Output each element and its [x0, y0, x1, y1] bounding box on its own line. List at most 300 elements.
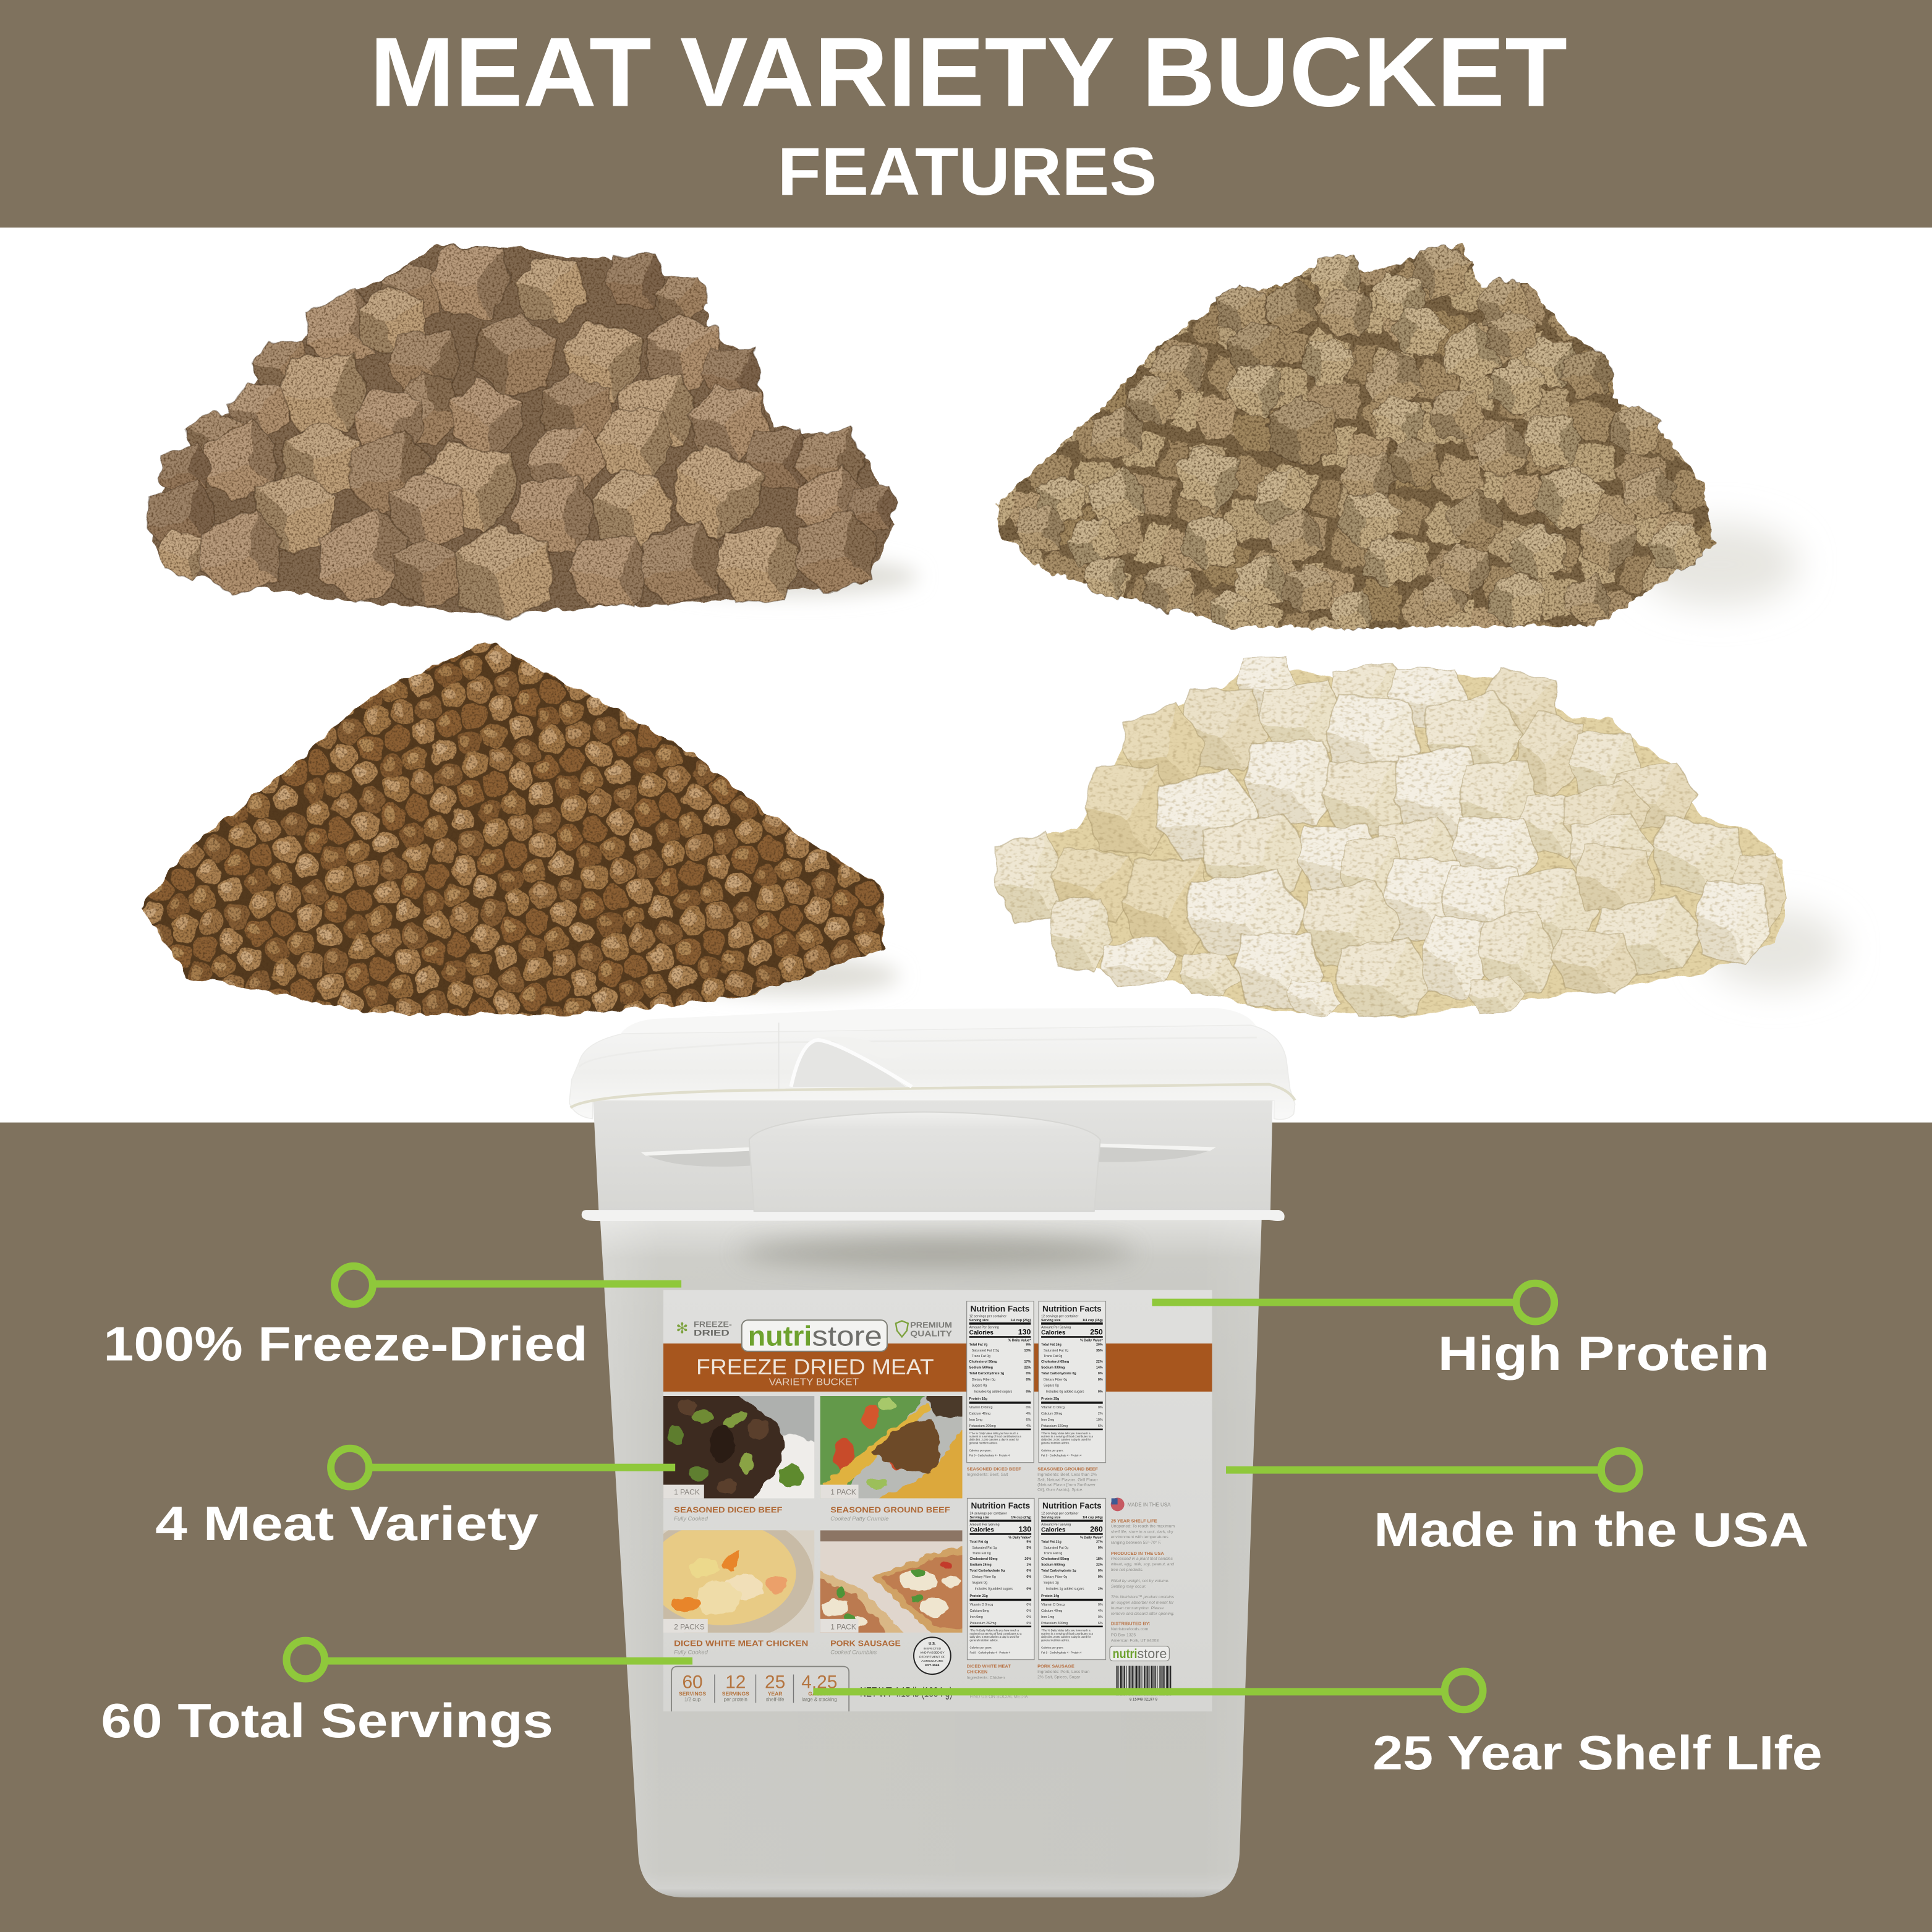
nutrition facts: seasoned ground beef: *The % Daily Value tells you how much a [1041, 1432, 1091, 1435]
pile shadow: ground beef [1639, 522, 1799, 606]
nutrition facts: diced white meat chicken: 24 servings per container [969, 1512, 1007, 1515]
ingredients: seasoned ground beef [1037, 1466, 1099, 1492]
food pile: diced white meat chicken [989, 653, 1789, 1020]
photo caption: seasoned ground beef: Cooked Patty Crumble [830, 1515, 888, 1521]
callout: 100% freeze-dried: 100% Freeze-Dried [103, 1317, 588, 1371]
label: nutristore logo: nutri [748, 1320, 812, 1351]
storage and distribution copy: Unopened: To reach the maximum [1111, 1524, 1175, 1528]
nutrition facts: seasoned diced beef: Calories [969, 1329, 994, 1336]
callout: made in the usa [1226, 1451, 1809, 1557]
nutrition facts: seasoned diced beef: 17% [1024, 1360, 1031, 1364]
nutrition facts: pork sausage: 4% [1098, 1609, 1103, 1613]
ingredients: pork sausage: 2% Salt, Spices, Sugar [1037, 1675, 1081, 1679]
nutrition facts: seasoned ground beef: 2% [1098, 1412, 1103, 1416]
nutrition facts: seasoned ground beef: Calories per gram: [1041, 1449, 1063, 1452]
stat: servings [679, 1672, 706, 1702]
nutrition facts: seasoned ground beef: Serving size [1041, 1319, 1060, 1322]
callout: made in the usa: Made in the USA [1374, 1504, 1809, 1557]
stat: servings per protein: SERVINGS [722, 1690, 749, 1696]
storage and distribution copy: 25 YEAR SHELF LIFE [1111, 1518, 1157, 1523]
nutrition facts: seasoned ground beef: Amount Per Serving [1041, 1326, 1071, 1329]
usda inspection seal: DEPARTMENT OF [919, 1655, 945, 1659]
nutrition facts: pork sausage: Iron 1mg [1041, 1615, 1054, 1619]
stat: servings per protein [722, 1672, 749, 1702]
nutrition facts: pork sausage: Calories [1041, 1526, 1066, 1533]
header banner [0, 0, 1932, 228]
photo caption: diced white meat chicken: Fully Cooked [674, 1649, 709, 1656]
callout: 25 year shelf life: 25 Year Shelf LIfe [1372, 1727, 1823, 1780]
nutrition facts: pork sausage: Serving size [1041, 1516, 1060, 1520]
ingredients: seasoned ground beef: Salt, Natural Flavors, Grill Flavor [1037, 1478, 1099, 1483]
nutrition facts: diced white meat chicken: Vitamin D 0mcg [969, 1603, 993, 1607]
ingredients: seasoned ground beef: Oil], Gum Arabic), Spice. [1037, 1488, 1083, 1492]
nutrition facts: seasoned ground beef: Saturated Fat 7g [1044, 1349, 1068, 1353]
usda inspection seal: U.S. [929, 1643, 936, 1646]
nutrition facts: pork sausage: Includes 1g added sugars [1046, 1588, 1084, 1591]
callout: high protein [1152, 1283, 1769, 1381]
nutrition facts: seasoned ground beef: Sodium 330mg [1041, 1366, 1065, 1370]
nutrition facts: diced white meat chicken: nutrient in a serving of food contributes to a [969, 1632, 1022, 1635]
nutrition facts: pork sausage: 0% [1098, 1615, 1103, 1619]
nutrition facts: seasoned ground beef: Potassium 320mg [1041, 1424, 1068, 1428]
storage and distribution copy: an oxygen absorber not meant for [1111, 1601, 1174, 1605]
nutrition facts: pork sausage: Calories per gram: [1041, 1646, 1063, 1649]
bucket handle recess [749, 1112, 1100, 1211]
nutrition facts: seasoned diced beef: 130 [1018, 1327, 1031, 1336]
pack tag: 1 pack: 1 PACK [674, 1487, 700, 1496]
storage and distribution copy: remove and discard after opening. [1111, 1612, 1175, 1616]
nutrition facts: pork sausage: Sugars 1g [1044, 1581, 1059, 1585]
pack tag: 1 pack [663, 1485, 704, 1498]
storage and distribution copy: wheat, egg, milk, soy, peanut, and [1111, 1562, 1174, 1567]
nutrition facts: seasoned diced beef: Serving size [969, 1319, 989, 1322]
ingredients: diced white meat chicken: CHICKEN [967, 1669, 987, 1674]
ingredients: pork sausage: Ingredients: Pork, Less than [1037, 1670, 1090, 1674]
food pile: pork sausage crumbles [142, 640, 885, 1015]
nutrition facts: pork sausage: Total Carbohydrate 1g [1041, 1569, 1076, 1573]
nutrition facts: seasoned diced beef: Nutrition Facts [971, 1303, 1030, 1313]
stat: servings: SERVINGS [679, 1690, 706, 1696]
nutrition facts: seasoned diced beef: *The % Daily Value tells you how much a [969, 1432, 1019, 1435]
stat: servings per protein: per protein [724, 1696, 747, 1702]
bottom panel background [0, 1123, 1932, 1932]
nutrition facts: seasoned diced beef: Total Carbohydrate 1g [969, 1372, 1004, 1376]
nutrition facts: diced white meat chicken: % Daily Value* [1008, 1536, 1032, 1539]
usda inspection seal: INSPECTED [924, 1647, 942, 1651]
nutrition facts: seasoned diced beef: Saturated Fat 2.5g [972, 1349, 999, 1353]
callout: high protein: High Protein [1438, 1327, 1769, 1381]
net weight: NET WT 4.15 lb (1884 g) [860, 1684, 953, 1700]
nutrition facts: seasoned diced beef: 0% [1026, 1372, 1031, 1376]
nutrition facts: seasoned ground beef: Calories [1041, 1329, 1066, 1336]
nutrition facts: diced white meat chicken: Calcium 8mg [969, 1609, 989, 1613]
ingredients: diced white meat chicken: DICED WHITE MEAT [967, 1664, 1011, 1669]
nutrition facts: pork sausage: Nutrition Facts [1042, 1500, 1102, 1510]
nutrition facts: seasoned diced beef: Sodium 500mg [969, 1366, 993, 1370]
nutrition facts: diced white meat chicken: 0% [1026, 1603, 1031, 1607]
nutrition facts: seasoned diced beef: 22% [1024, 1366, 1031, 1370]
nutrition facts: seasoned diced beef: 6% [1026, 1418, 1031, 1422]
storage and distribution copy: shelf life, store in a cool, dark, dry [1111, 1530, 1173, 1534]
nutrition facts: seasoned ground beef: 0% [1098, 1378, 1103, 1382]
ingredients: seasoned diced beef [967, 1466, 1021, 1477]
nutrition facts: diced white meat chicken: Total Fat 4g [969, 1541, 988, 1544]
label: orange banner [663, 1343, 1212, 1392]
photo caption: seasoned diced beef: SEASONED DICED BEEF [674, 1505, 783, 1515]
nutrition facts: diced white meat chicken: Calories [969, 1526, 994, 1533]
nutrition facts: pork sausage: Calcium 40mg [1041, 1609, 1062, 1613]
storage and distribution copy: environment with temperatures [1111, 1535, 1168, 1539]
nutrition facts: pork sausage: nutrient in a serving of food contributes to a [1041, 1632, 1094, 1635]
made in the usa note: MADE IN THE USA [1128, 1502, 1171, 1507]
nutrition facts: pork sausage: 1/4 cup (40g) [1083, 1516, 1103, 1520]
nutrition facts: diced white meat chicken: 20% [1024, 1557, 1031, 1561]
nutrition facts: diced white meat chicken: 0% [1026, 1615, 1031, 1619]
nutrition facts: seasoned diced beef: % Daily Value* [1008, 1339, 1031, 1343]
nutrition facts: seasoned ground beef: % Daily Value* [1080, 1339, 1104, 1343]
nutrition facts: diced white meat chicken: Protein 21g [969, 1594, 988, 1598]
nutrition facts: seasoned diced beef: nutrient in a serving of food contributes to a [969, 1435, 1021, 1438]
nutrition facts: seasoned diced beef: general nutrition advice. [969, 1441, 998, 1444]
ingredients: pork sausage: PORK SAUSAGE [1037, 1664, 1075, 1669]
nutrition facts: seasoned ground beef: 12 servings per container [1041, 1315, 1079, 1319]
nutrition facts: seasoned ground beef: 250 [1090, 1327, 1103, 1336]
stat: gallons: 4.25 [801, 1672, 837, 1692]
storage and distribution copy: ranging between 55°-70° F. [1111, 1540, 1162, 1545]
nutrition facts: seasoned ground beef: 0% [1098, 1390, 1103, 1394]
nutrition facts: pork sausage: 2% [1098, 1588, 1103, 1591]
nutrition facts: seasoned ground beef: Dietary Fiber 0g [1044, 1378, 1067, 1382]
ingredients: pork sausage [1037, 1664, 1090, 1679]
small nutristore logo: nutri [1113, 1647, 1138, 1661]
nutrition facts: diced white meat chicken: *The % Daily Value tells you how much a [969, 1629, 1019, 1632]
product: white bucket [569, 1008, 1295, 1899]
ingredients: diced white meat chicken: Ingredients: Chicken [967, 1675, 1005, 1680]
nutrition facts: seasoned ground beef: Protein 25g [1041, 1397, 1059, 1401]
photo caption: seasoned diced beef [674, 1505, 783, 1521]
label: freeze-dried badge: DRIED [694, 1327, 730, 1337]
callout: 4 meat variety [155, 1449, 675, 1551]
callout: 4 meat variety: 4 Meat Variety [155, 1497, 538, 1551]
stat: shelf life: 25 [765, 1672, 785, 1692]
nutrition facts: diced white meat chicken: 1% [1026, 1563, 1031, 1567]
nutrition facts: seasoned ground beef: general nutrition advice. [1041, 1441, 1070, 1444]
nutrition facts: diced white meat chicken: 1/4 cup (27g) [1011, 1516, 1031, 1520]
nutrition facts: diced white meat chicken: Fat 9 · Carbohydrate 4 · Protein 4 [969, 1651, 1010, 1654]
nutrition facts: diced white meat chicken: Nutrition Facts [971, 1500, 1030, 1510]
barcode [1117, 1680, 1172, 1701]
nutrition facts: pork sausage: 12 servings per container [1041, 1512, 1079, 1515]
barcode: 8 15049 02197 9 [1130, 1698, 1158, 1701]
nutrition facts: seasoned ground beef: 1/4 cup (35g) [1083, 1319, 1103, 1322]
nutrition facts: pork sausage: 0% [1098, 1575, 1103, 1579]
pack tag: 2 packs [663, 1619, 708, 1633]
nutrition facts: seasoned diced beef: Iron 1mg [969, 1418, 982, 1422]
nutrition facts: pork sausage: 0% [1098, 1569, 1103, 1573]
nutrition facts: diced white meat chicken: 5% [1026, 1541, 1031, 1544]
nutrition facts: pork sausage: 0% [1098, 1603, 1103, 1607]
nutrition facts: diced white meat chicken: daily diet. 2,000 calories a day is used for [969, 1635, 1019, 1638]
nutrition facts: seasoned diced beef: Cholesterol 50mg [969, 1360, 997, 1364]
stat: shelf life [765, 1672, 785, 1702]
nutrition facts: seasoned diced beef: 0% [1026, 1390, 1031, 1394]
nutrition facts: diced white meat chicken: 0% [1026, 1575, 1031, 1579]
nutrition facts: seasoned ground beef: Iron 2mg [1041, 1418, 1054, 1422]
nutrition facts: diced white meat chicken: Cholesterol 60mg [969, 1557, 998, 1561]
pack tag: 1 pack: 1 PACK [830, 1623, 856, 1632]
nutrition facts: seasoned ground beef: 35% [1096, 1349, 1103, 1353]
nutrition facts: diced white meat chicken: Calories per gram: [969, 1646, 992, 1649]
nutrition facts: seasoned ground beef: 22% [1096, 1360, 1103, 1364]
nutrition facts: diced white meat chicken: 0% [1026, 1609, 1031, 1613]
nutrition facts: pork sausage: daily diet. 2,000 calories a day is used for [1041, 1635, 1091, 1638]
nutrition facts: pork sausage: *The % Daily Value tells you how much a [1041, 1629, 1091, 1632]
storage and distribution copy: American Fork, UT 84003 [1111, 1639, 1159, 1643]
bucket label [640, 1290, 1212, 1711]
nutrition facts: seasoned diced beef: Total Fat 7g [969, 1343, 987, 1347]
pack tag: 1 pack [820, 1485, 859, 1498]
label: freeze-dried badge: FREEZE- [694, 1319, 732, 1329]
label: freeze-dried badge [676, 1319, 732, 1337]
nutrition facts: seasoned ground beef: 10% [1096, 1418, 1103, 1422]
nutrition facts: diced white meat chicken: Saturated Fat 1g [972, 1546, 997, 1550]
nutrition facts: diced white meat chicken: Dietary Fiber 0g [972, 1575, 996, 1579]
label: premium quality badge: QUALITY [910, 1329, 953, 1338]
nutrition facts: seasoned diced beef: 4% [1026, 1412, 1031, 1416]
nutrition facts: seasoned ground beef: Calcium 30mg [1041, 1412, 1062, 1416]
nutrition facts: seasoned diced beef: 9% [1026, 1343, 1031, 1347]
nutrition facts: diced white meat chicken: Potassium 262mg [969, 1622, 997, 1625]
stats box [671, 1667, 849, 1711]
nutrition facts: pork sausage: Saturated Fat 0g [1044, 1546, 1068, 1550]
stat: gallons [801, 1672, 837, 1702]
nutrition facts: diced white meat chicken: Total Carbohydrate 0g [969, 1569, 1005, 1573]
label: premium quality badge [896, 1320, 953, 1338]
nutrition facts: pork sausage: 27% [1096, 1541, 1103, 1544]
nutrition facts: pork sausage: 22% [1096, 1563, 1103, 1567]
nutrition facts: seasoned ground beef: 6% [1098, 1424, 1103, 1428]
nutrition facts: pork sausage [1039, 1498, 1106, 1660]
pile shadow: diced beef [659, 557, 918, 597]
callout: 60 total servings [101, 1641, 692, 1748]
photo: seasoned ground beef [820, 1396, 962, 1499]
usda inspection seal: AND PASSED BY [920, 1651, 945, 1655]
nutrition facts: pork sausage: Potassium 300mg [1041, 1622, 1068, 1625]
photo caption: pork sausage [830, 1639, 901, 1656]
nutrition facts: diced white meat chicken: 6% [1026, 1622, 1031, 1625]
ingredients: seasoned diced beef: Ingredients: Beef, Salt [967, 1473, 1008, 1477]
nutrition facts: seasoned diced beef: Sugars 0g [972, 1384, 987, 1388]
nutrition facts: seasoned ground beef: Trans Fat 0g [1044, 1355, 1062, 1358]
label: nutristore logo [742, 1320, 887, 1351]
photo caption: pork sausage: PORK SAUSAGE [830, 1639, 901, 1648]
stat: gallons: large & stacking [802, 1696, 837, 1702]
storage and distribution copy: tree nut products. [1111, 1568, 1144, 1572]
storage and distribution copy: Nutristorefoods.com [1111, 1627, 1149, 1632]
nutrition facts: pork sausage: Dietary Fiber 0g [1044, 1575, 1067, 1579]
nutrition facts: seasoned ground beef: Total Carbohydrate 0g [1041, 1372, 1076, 1376]
nutrition facts: diced white meat chicken: Sugars 0g [972, 1581, 987, 1585]
nutrition facts: seasoned diced beef: daily diet. 2,000 calories a day is used for [969, 1438, 1019, 1441]
bucket rim band [582, 1210, 1285, 1221]
nutrition facts: seasoned ground beef: 0% [1098, 1406, 1103, 1410]
nutrition facts: diced white meat chicken: Trans Fat 0g [972, 1552, 991, 1555]
ingredients: seasoned ground beef: (Natural Flavor [from Sunflower [1037, 1483, 1096, 1487]
photo: pork sausage [813, 1530, 973, 1639]
pile shadow: chicken [1706, 909, 1842, 988]
nutrition facts: diced white meat chicken: Sodium 25mg [969, 1563, 992, 1567]
storage and distribution copy: PO Box 1325 [1111, 1633, 1136, 1638]
nutrition facts: pork sausage: Cholesterol 55mg [1041, 1557, 1069, 1561]
small nutristore logo [1110, 1646, 1169, 1661]
nutrition facts: diced white meat chicken [967, 1498, 1034, 1660]
nutrition facts: pork sausage: Total Fat 21g [1041, 1541, 1062, 1544]
nutrition facts: seasoned ground beef: 20% [1096, 1343, 1103, 1347]
photo caption: pork sausage: Cooked Crumbles [830, 1649, 877, 1656]
label: premium quality badge: PREMIUM [910, 1320, 952, 1329]
storage and distribution copy [1111, 1518, 1175, 1643]
nutrition facts: seasoned diced beef [967, 1301, 1034, 1463]
nutrition facts: seasoned ground beef: Total Fat 16g [1041, 1343, 1062, 1347]
nutrition facts: pork sausage: 6% [1098, 1622, 1103, 1625]
storage and distribution copy: This Nutristore™ product contains [1111, 1595, 1175, 1599]
nutrition facts: diced white meat chicken: 130 [1019, 1525, 1031, 1533]
ingredients: seasoned ground beef: SEASONED GROUND BEEF [1037, 1466, 1098, 1472]
nutrition facts: seasoned diced beef: Calcium 40mg [969, 1412, 990, 1416]
photo caption: diced white meat chicken [674, 1639, 808, 1656]
usda inspection seal [914, 1637, 951, 1674]
callout: 100% freeze-dried [103, 1266, 681, 1371]
callout: 25 year shelf life [813, 1671, 1823, 1780]
nutrition facts: seasoned diced beef: Fat 9 · Carbohydrate 4 · Protein 4 [969, 1454, 1010, 1457]
social media note: FIND US ON SOCIAL MEDIA [969, 1694, 1028, 1699]
nutrition facts: seasoned diced beef: Protein 16g [969, 1397, 987, 1401]
ingredients: seasoned ground beef: Ingredients: Beef, Less than 2% [1037, 1473, 1097, 1477]
nutrition facts: pork sausage: 0% [1098, 1546, 1103, 1550]
title: MEAT VARIETY BUCKET [370, 17, 1567, 127]
usda inspection seal: AGRICULTURE [921, 1659, 943, 1663]
usda inspection seal: EST. 9569 [925, 1664, 940, 1667]
nutrition facts: seasoned ground beef: Sugars 0g [1044, 1384, 1059, 1388]
stat: shelf life: YEAR [768, 1690, 782, 1696]
nutrition facts: seasoned ground beef: Fat 9 · Carbohydrate 4 · Protein 4 [1041, 1454, 1082, 1457]
nutrition facts: pork sausage: Amount Per Serving [1041, 1523, 1071, 1526]
callout: 60 total servings: 60 Total Servings [101, 1695, 553, 1748]
nutrition facts: seasoned diced beef: 12 servings per container [969, 1315, 1006, 1319]
label: freeze-dried badge: ✻ [676, 1320, 688, 1337]
nutrition facts: seasoned diced beef: Includes 0g added sugars [974, 1390, 1013, 1394]
pack tag: 1 pack [820, 1619, 859, 1633]
bucket lid [569, 1008, 1295, 1120]
storage and distribution copy: Filled by weight, not by volume. [1111, 1579, 1169, 1583]
nutrition facts: diced white meat chicken: Amount Per Serving [969, 1523, 1000, 1526]
nutrition facts: seasoned ground beef: Nutrition Facts [1042, 1303, 1102, 1313]
nutrition facts: pork sausage: 260 [1090, 1525, 1103, 1533]
photo: seasoned diced beef [663, 1396, 815, 1499]
bucket upper body [593, 1091, 1273, 1214]
nutrition facts: seasoned ground beef: Cholesterol 65mg [1041, 1360, 1069, 1364]
nutrition facts: seasoned diced beef: Trans Fat 0g [972, 1355, 990, 1358]
food pile: seasoned ground beef [997, 234, 1714, 635]
photo caption: seasoned ground beef: SEASONED GROUND BEEF [830, 1505, 950, 1515]
nutrition facts: seasoned diced beef: 1/4 cup (26g) [1010, 1319, 1031, 1322]
nutrition facts: seasoned ground beef: nutrient in a serving of food contributes to a [1041, 1435, 1094, 1438]
subtitle: FEATURES [778, 134, 1157, 210]
nutrition facts: seasoned ground beef: 14% [1096, 1366, 1103, 1370]
nutrition facts: seasoned diced beef: Dietary Fiber 0g [972, 1378, 995, 1382]
stat: shelf life: shelf-life [766, 1696, 785, 1702]
nutrition facts: pork sausage: Fat 9 · Carbohydrate 4 · Protein 4 [1041, 1651, 1082, 1654]
storage and distribution copy: Settling may occur. [1111, 1585, 1146, 1589]
ingredients: seasoned diced beef: SEASONED DICED BEEF [967, 1466, 1021, 1472]
label: product subtitle: VARIETY BUCKET [769, 1377, 859, 1388]
small nutristore logo: store [1138, 1647, 1167, 1661]
nutrition facts: pork sausage: 18% [1096, 1557, 1103, 1561]
pack tag: 1 pack: 1 PACK [830, 1487, 856, 1496]
photo: diced white meat chicken [640, 1513, 814, 1641]
nutrition facts: seasoned diced beef: 0% [1026, 1378, 1031, 1382]
stat: gallons: GALLON [808, 1690, 830, 1696]
photo caption: seasoned diced beef: Fully Cooked [674, 1515, 709, 1521]
bucket side ribs [640, 1143, 1216, 1167]
nutrition facts: seasoned diced beef: 0% [1026, 1406, 1031, 1410]
nutrition facts: pork sausage: Vitamin D 0mcg [1041, 1603, 1065, 1607]
nutrition facts: diced white meat chicken: 5% [1026, 1546, 1031, 1550]
food pile: seasoned diced beef cubes [143, 230, 899, 625]
nutrition facts: diced white meat chicken: 0% [1026, 1588, 1031, 1591]
storage and distribution copy: Processed in a plant that handles [1111, 1557, 1173, 1561]
stat: servings per protein: 12 [725, 1672, 746, 1692]
storage and distribution copy: human consumption. Please [1111, 1606, 1164, 1611]
nutrition facts: diced white meat chicken: general nutrition advice. [969, 1638, 998, 1641]
nutrition facts: pork sausage: % Daily Value* [1080, 1536, 1104, 1539]
bucket lower body [592, 1217, 1269, 1899]
stat: servings: 60 [682, 1672, 703, 1692]
made in the usa note [1111, 1497, 1171, 1511]
pack tag: 2 packs: 2 PACKS [674, 1623, 705, 1632]
nutrition facts: pork sausage: Protein 14g [1041, 1594, 1059, 1598]
pile shadow: sausage crumbles [678, 956, 900, 995]
storage and distribution copy: PRODUCED IN THE USA [1111, 1551, 1164, 1556]
photo caption: seasoned ground beef [830, 1505, 950, 1521]
nutrition facts: seasoned ground beef: daily diet. 2,000 calories a day is used for [1041, 1438, 1091, 1441]
nutrition facts: seasoned diced beef: 4% [1026, 1424, 1031, 1428]
lid pull tab [791, 1037, 912, 1087]
nutrition facts: pork sausage: Trans Fat 0g [1044, 1552, 1062, 1555]
nutrition facts: seasoned ground beef: Vitamin D 0mcg [1041, 1406, 1065, 1410]
nutrition facts: diced white meat chicken: Includes 0g added sugars [974, 1588, 1013, 1591]
nutrition facts: seasoned diced beef: Potassium 200mg [969, 1424, 996, 1428]
nutrition facts: diced white meat chicken: Serving size [969, 1516, 989, 1520]
ingredients: diced white meat chicken [967, 1664, 1011, 1680]
nutrition facts: seasoned ground beef [1039, 1301, 1106, 1463]
nutrition facts: seasoned ground beef: 0% [1098, 1372, 1103, 1376]
stat: servings: 1/2 cup [684, 1696, 701, 1702]
nutrition facts: pork sausage: Sodium 500mg [1041, 1563, 1065, 1567]
storage and distribution copy: DISTRIBUTED BY: [1111, 1621, 1151, 1627]
label: nutristore logo: store [812, 1320, 882, 1351]
nutrition facts: seasoned diced beef: 13% [1024, 1349, 1031, 1353]
photo caption: diced white meat chicken: DICED WHITE MEAT CHICKEN [674, 1639, 808, 1648]
nutrition facts: seasoned diced beef: Vitamin D 0mcg [969, 1406, 993, 1410]
nutrition facts: seasoned ground beef: Includes 0g added sugars [1046, 1390, 1084, 1394]
nutrition facts: pork sausage: general nutrition advice. [1041, 1638, 1070, 1641]
nutrition facts: diced white meat chicken: 0% [1026, 1569, 1031, 1573]
label: product name: FREEZE DRIED MEAT [696, 1355, 934, 1379]
nutrition facts: seasoned diced beef: Amount Per Serving [969, 1326, 999, 1329]
nutrition facts: diced white meat chicken: Iron 0mg [969, 1615, 983, 1619]
nutrition facts: seasoned diced beef: Calories per gram: [969, 1449, 992, 1452]
